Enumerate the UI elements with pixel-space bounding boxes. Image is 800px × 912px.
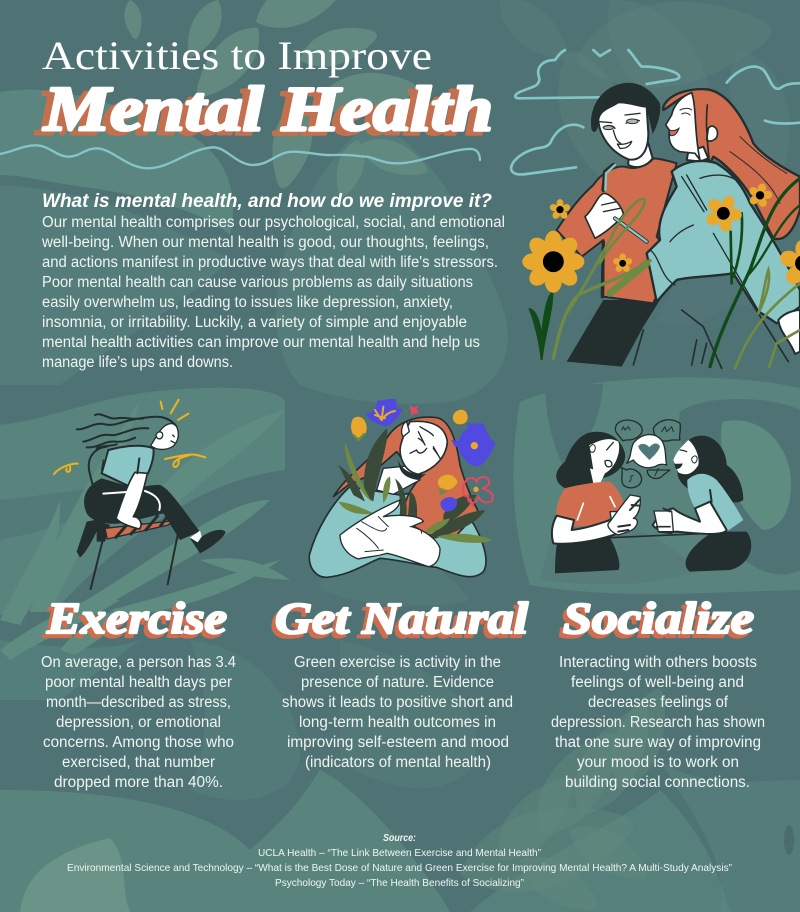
intro paragraph: manage life’s ups and downs. xyxy=(42,354,233,371)
sources xyxy=(67,832,732,889)
text: get natural: Green exercise is activity in the xyxy=(294,654,501,671)
sources: Psychology Today – “The Health Benefits of Socializing” xyxy=(275,877,524,889)
title line: Activities to Improve xyxy=(42,33,432,78)
hands xyxy=(340,500,440,567)
text: socialize: building social connections. xyxy=(565,774,750,791)
text: get natural xyxy=(282,654,513,771)
torso and arm xyxy=(102,446,154,487)
energy marks xyxy=(54,400,205,474)
intro paragraph xyxy=(41,214,505,371)
speech bubbles xyxy=(615,420,680,488)
sources: UCLA Health – “The Link Between Exercise and Mental Health” xyxy=(258,847,541,859)
headline: Mental Health: Mental Health xyxy=(35,77,485,148)
text: get natural: shows it leads to positive short and xyxy=(282,694,513,711)
foliage xyxy=(338,428,485,542)
text: exercise: dropped more than 40%. xyxy=(54,774,223,791)
text: exercise: exercised, that number xyxy=(62,754,215,771)
text: exercise: depression, or emotional xyxy=(56,714,221,731)
clouds xyxy=(511,50,800,174)
flowers xyxy=(351,399,496,512)
hurdle xyxy=(91,515,178,589)
text: exercise: month—described as stress, xyxy=(46,694,231,711)
section heading: Exercise: Exercise xyxy=(42,598,223,647)
intro paragraph: mental health activities can improve our mental health and help us xyxy=(42,334,480,351)
text: get natural: improving self-esteem and mood xyxy=(287,734,509,751)
legs and body xyxy=(84,478,200,540)
headline: Mental Health: Mental Health xyxy=(43,73,493,144)
sources: Environmental Science and Technology – “What is the Best Dose of Nature and Green Exercise for Improving Mental Health? A Multi-Study Analysis” xyxy=(67,862,732,874)
intro paragraph: Poor mental health can cause various problems as daily situations xyxy=(42,274,473,291)
wavy divider xyxy=(0,145,480,168)
intro paragraph: Our mental health comprises our psychological, social, and emotional xyxy=(42,214,505,231)
illustration: woman jumping a hurdle xyxy=(54,400,226,589)
hair xyxy=(77,414,177,448)
left woman xyxy=(555,535,619,573)
intro paragraph: and actions manifest in productive ways that deal with life's stressors. xyxy=(42,254,498,271)
section heading: Socialize: Socialize xyxy=(559,598,750,647)
text: exercise: On average, a person has 3.4 xyxy=(41,654,236,671)
text: socialize: depression. Research has shown xyxy=(551,714,765,731)
text: socialize: decreases feelings of xyxy=(588,694,729,711)
sources: Source: xyxy=(383,832,416,844)
text: socialize xyxy=(551,654,765,791)
section heading: Get Natural: Get Natural xyxy=(271,598,525,647)
illustration: couple walking among flowers xyxy=(511,50,800,368)
illustration: woman hugging flowers xyxy=(309,399,496,577)
flowers and stems xyxy=(553,199,800,368)
text: socialize: Interacting with others boosts xyxy=(559,654,757,671)
woman xyxy=(603,89,800,368)
table xyxy=(610,534,702,538)
man xyxy=(557,83,677,367)
intro paragraph: insomnia, or irritability. Luckily, a variety of simple and enjoyable xyxy=(42,314,467,331)
subheading: What is mental health, and how do we improve it? xyxy=(42,191,492,212)
intro paragraph: easily overwhelm us, leading to issues like depression, anxiety, xyxy=(42,294,453,311)
right woman xyxy=(686,532,751,572)
section heading: Get Natural: Get Natural xyxy=(275,594,529,643)
text: socialize: your mood is to work on xyxy=(577,754,739,771)
text: get natural: long-term health outcomes in xyxy=(299,714,496,731)
section heading: Exercise: Exercise xyxy=(46,594,227,643)
text: get natural: (indicators of mental health) xyxy=(305,754,491,771)
section heading: Socialize: Socialize xyxy=(563,594,754,643)
text: get natural: presence of nature. Evidence xyxy=(301,674,494,691)
illustration: two friends talking over coffee xyxy=(552,420,751,573)
text: exercise xyxy=(41,654,236,791)
intro paragraph: well-being. When our mental health is good, our thoughts, feelings, xyxy=(41,234,489,251)
text: socialize: that one sure way of improving xyxy=(555,734,761,751)
text: socialize: feelings of well-being and xyxy=(571,674,744,691)
text: exercise: poor mental health days per xyxy=(45,674,232,691)
text: exercise: concerns. Among those who xyxy=(43,734,234,751)
